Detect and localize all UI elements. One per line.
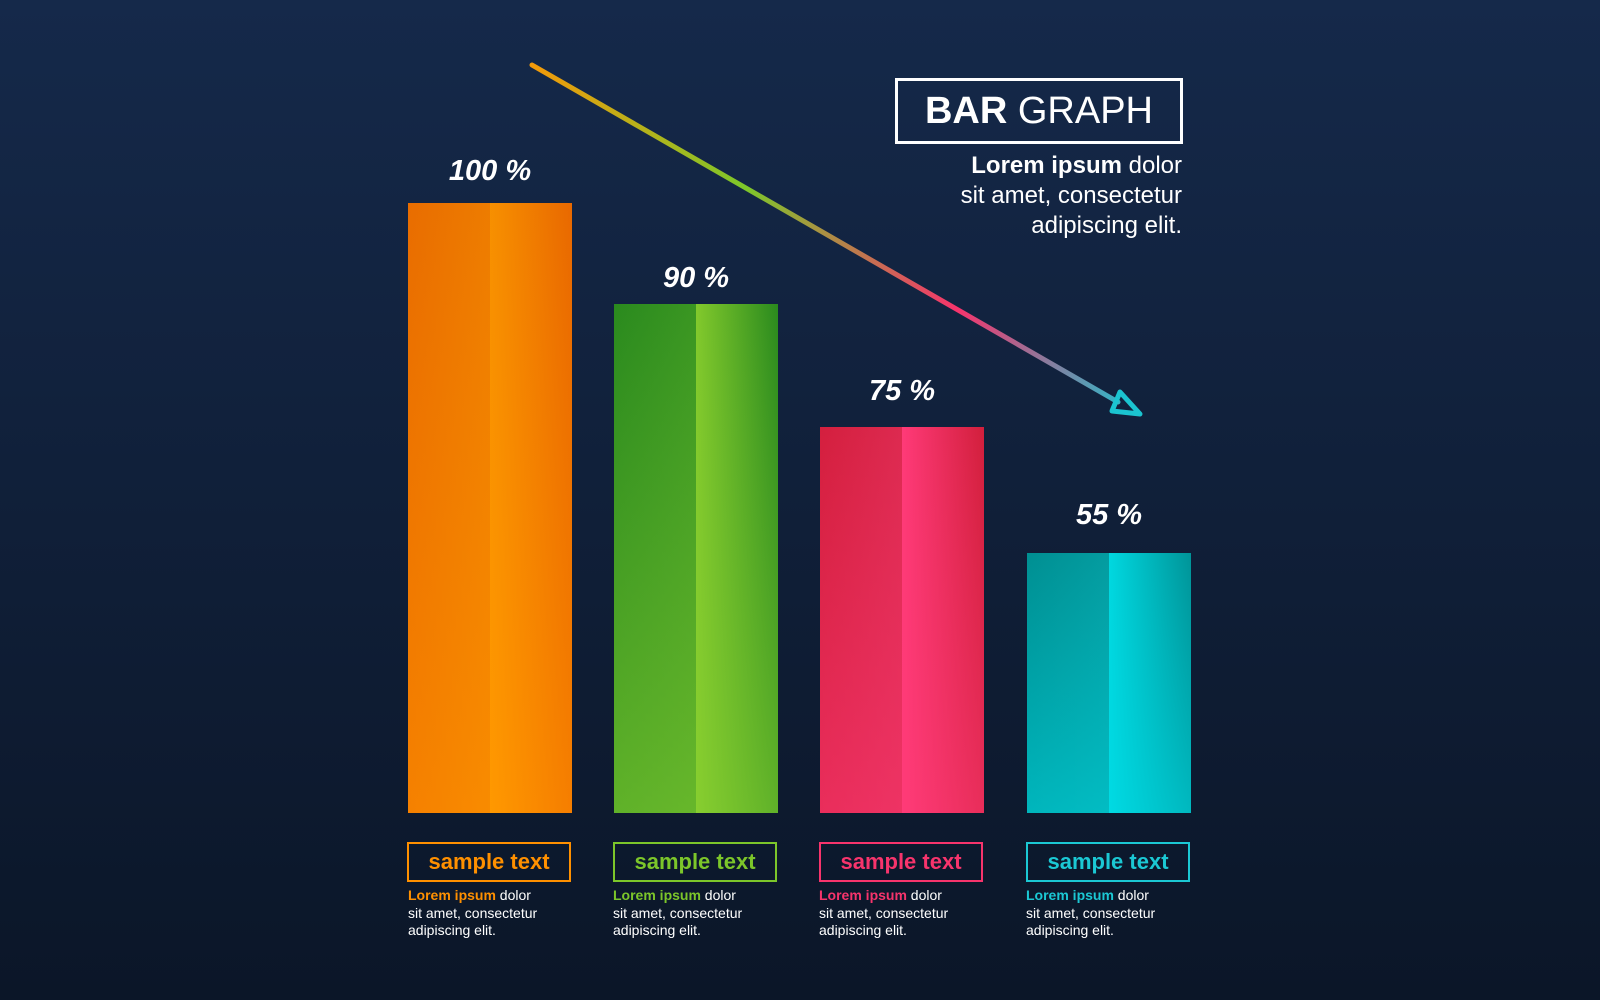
value 75%: 75 % — [869, 375, 935, 407]
label box pink — [819, 842, 983, 882]
desc green: sit amet, consectetur — [613, 904, 742, 920]
desc pink: Lorem ipsum dolor — [819, 887, 942, 903]
title: BAR GRAPH — [925, 90, 1153, 132]
desc orange: sit amet, consectetur — [408, 904, 537, 920]
bar: 75% pink — [820, 427, 984, 813]
value 90%: 90 % — [663, 262, 729, 294]
desc orange: Lorem ipsum dolor — [408, 887, 531, 903]
desc cyan: adipiscing elit. — [1026, 922, 1114, 938]
label box cyan: sample text — [1047, 849, 1169, 874]
label box orange — [407, 842, 571, 882]
desc pink: sit amet, consectetur — [819, 904, 948, 920]
desc pink — [819, 887, 948, 938]
desc green: adipiscing elit. — [613, 922, 701, 938]
value 100%: 100 % — [449, 155, 531, 187]
label box orange: sample text — [428, 849, 550, 874]
desc cyan: sit amet, consectetur — [1026, 904, 1155, 920]
bar: 90% green — [614, 304, 778, 813]
bar: 55% cyan — [1027, 553, 1191, 813]
desc cyan: Lorem ipsum dolor — [1026, 887, 1149, 903]
subtitle text: adipiscing elit. — [1031, 212, 1182, 239]
desc green: Lorem ipsum dolor — [613, 887, 736, 903]
value 55%: 55 % — [1076, 499, 1142, 531]
title — [895, 78, 1183, 144]
subtitle text: sit amet, consectetur — [961, 182, 1182, 209]
label box cyan — [1026, 842, 1190, 882]
desc pink: adipiscing elit. — [819, 922, 907, 938]
desc orange: adipiscing elit. — [408, 922, 496, 938]
desc cyan — [1026, 887, 1155, 938]
label box pink: sample text — [840, 849, 962, 874]
desc green — [613, 887, 742, 938]
label box green — [613, 842, 777, 882]
desc orange — [408, 887, 537, 938]
label box green: sample text — [634, 849, 756, 874]
subtitle text — [961, 152, 1182, 239]
subtitle text: Lorem ipsum dolor — [971, 152, 1182, 179]
bar: 100% orange — [408, 203, 572, 813]
